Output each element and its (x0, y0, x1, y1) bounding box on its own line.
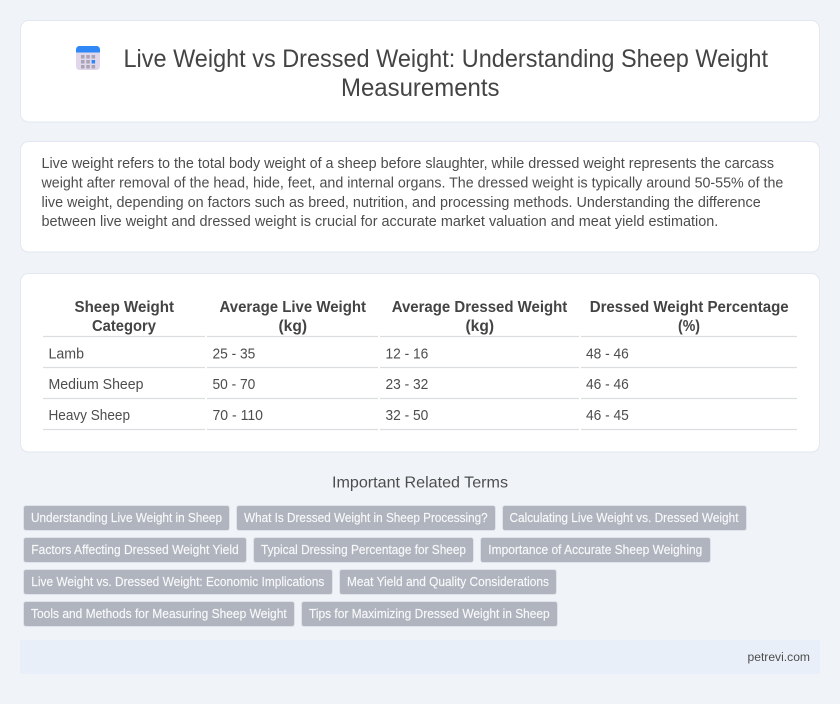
table row: lamb: 25 - 35 (212, 346, 255, 362)
table row: medium sheep (48, 377, 629, 393)
text block: introduction paragraph: Live weight refers to the total body weight of a sheep before slaughter, while dressed weight represents the carcass (42, 156, 774, 172)
table row: medium sheep: 46 - 46 (586, 377, 629, 393)
tag: Typical Dressing Percentage for Sheep (261, 543, 466, 557)
icon: calendar (76, 46, 100, 70)
table row: medium sheep: 50 - 70 (212, 377, 255, 393)
tag: Live Weight vs. Dressed Weight: Economic Implications (31, 575, 324, 589)
table row: medium sheep: Medium Sheep (48, 377, 144, 393)
table row: heavy sheep (48, 408, 629, 424)
footer: petrevi.com (748, 650, 810, 664)
table header: Average Live Weight (220, 299, 367, 316)
tag (340, 570, 556, 594)
tag (254, 538, 474, 562)
table header: Sheep Weight (74, 299, 175, 316)
title: Live Weight vs Dressed Weight: Understanding Sheep Weight (124, 46, 768, 73)
heading: important related terms: Important Related Terms (332, 474, 508, 492)
tag group: related terms (24, 506, 746, 626)
table row: heavy sheep: 70 - 110 (212, 408, 263, 424)
table header: Average Dressed Weight (392, 299, 568, 316)
text block: introduction paragraph: live weight, depending on factors such as breed, nutrition, and processing methods. Understanding the difference (42, 195, 761, 211)
table header: (%) (678, 318, 700, 335)
tag: Tools and Methods for Measuring Sheep Weight (31, 607, 287, 621)
tag: Importance of Accurate Sheep Weighing (488, 543, 702, 557)
table header: (kg) (278, 318, 307, 335)
tag: Tips for Maximizing Dressed Weight in Sheep (309, 607, 550, 621)
tag (302, 602, 558, 626)
tag (24, 506, 230, 530)
table row: heavy sheep: 32 - 50 (386, 408, 428, 424)
table row: heavy sheep: 46 - 45 (586, 408, 629, 424)
tag (236, 506, 496, 530)
tag (502, 506, 746, 530)
footer (20, 640, 820, 674)
table row: lamb: 48 - 46 (586, 346, 629, 362)
tag (24, 538, 246, 562)
table header: Dressed Weight Percentage (590, 299, 789, 316)
text block: introduction paragraph (41, 156, 783, 230)
table header: Category (92, 318, 156, 335)
tag (24, 602, 294, 626)
panel: title card (20, 20, 820, 122)
tag: Calculating Live Weight vs. Dressed Weight (510, 511, 739, 525)
table row: lamb: 12 - 16 (386, 346, 428, 362)
text block: introduction paragraph: between live weight and dressed weight is crucial for accurate market valuation and meat yield estimation. (42, 214, 718, 230)
table row: lamb: Lamb (48, 346, 84, 362)
tag (480, 538, 710, 562)
table header (74, 299, 789, 335)
tag: Factors Affecting Dressed Weight Yield (31, 543, 239, 557)
table header: (kg) (466, 318, 494, 335)
table row: medium sheep: 23 - 32 (386, 377, 428, 393)
table row: lamb (48, 346, 629, 362)
tag (24, 570, 332, 594)
tag: Understanding Live Weight in Sheep (31, 511, 222, 525)
panel: introduction (20, 142, 820, 252)
tag: Meat Yield and Quality Considerations (347, 575, 549, 589)
tag: What Is Dressed Weight in Sheep Processing? (244, 511, 488, 525)
panel: weight table (20, 274, 820, 452)
title (124, 46, 768, 102)
title: Measurements (341, 75, 500, 102)
text block: introduction paragraph: weight after removal of the head, hide, feet, and internal organs. The dressed weight is typically around 50-55% of the (41, 176, 783, 192)
table row: heavy sheep: Heavy Sheep (48, 408, 130, 424)
